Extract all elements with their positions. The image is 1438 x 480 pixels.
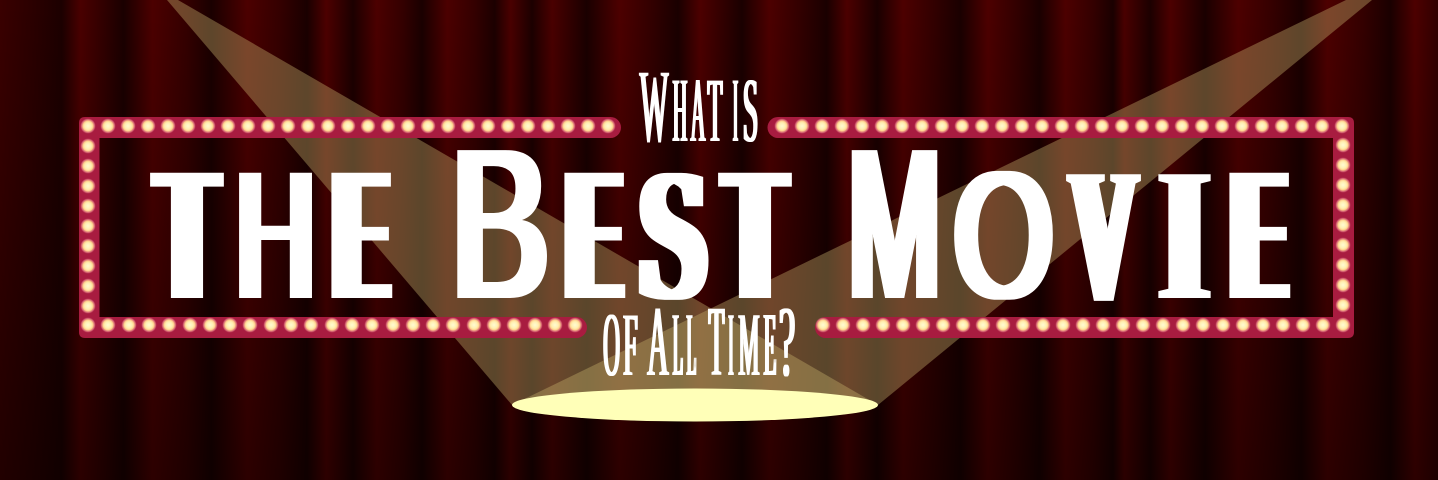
- heading: of All Time?: E: [764, 295, 776, 396]
- heading: The Best Movie: H: [236, 133, 315, 337]
- marquee frame: right section: [768, 117, 1354, 338]
- heading: What is: A: [691, 61, 705, 162]
- heading: of All Time?: M: [739, 296, 759, 396]
- heading: The Best Movie: O: [954, 134, 1053, 337]
- heading: of All Time?: I: [729, 295, 733, 396]
- heading: The Best Movie: E: [338, 135, 383, 338]
- heading: The Best Movie: T: [160, 135, 214, 337]
- heading: of All Time?: A: [648, 287, 669, 398]
- spotlight beam from top left: [167, 0, 878, 405]
- heading: of All Time?: [603, 285, 795, 398]
- heading: The Best Movie: E: [1236, 135, 1281, 338]
- spotlight beam from top right: [512, 0, 1372, 405]
- marquee bulbs: bottom left row: [80, 317, 583, 333]
- marquee bulbs: top left row: [80, 118, 616, 134]
- marquee bulbs: top right row: [774, 118, 1350, 134]
- heading: The Best Movie: V: [1072, 130, 1135, 339]
- heading: What is: W: [640, 49, 668, 164]
- heading: What is: I: [733, 60, 738, 162]
- heading: The Best Movie: S: [639, 131, 707, 340]
- heading: What is: S: [743, 58, 758, 161]
- spotlight pool on stage: [512, 388, 878, 422]
- heading: The Best Movie: I: [1161, 130, 1208, 340]
- heading: What is: [640, 49, 758, 164]
- heading: The Best Movie: [160, 104, 1281, 345]
- heading: What is: T: [708, 59, 722, 161]
- heading: of All Time?: ?: [779, 285, 795, 398]
- heading: of All Time?: T: [709, 285, 724, 397]
- heading: of All Time?: F: [623, 295, 638, 395]
- heading: The Best Movie: T: [728, 135, 782, 337]
- marquee frame: left section: [79, 117, 621, 338]
- heading: The Best Movie: M: [849, 104, 940, 345]
- heading: of All Time?: L: [687, 296, 696, 396]
- marquee bulbs: right column: [1335, 137, 1351, 313]
- heading: The Best Movie: E: [571, 135, 616, 338]
- heading: of All Time?: O: [603, 295, 620, 396]
- marquee bulbs: left column: [80, 138, 96, 314]
- heading: What is: H: [673, 61, 687, 162]
- heading: The Best Movie: B: [451, 104, 549, 344]
- marquee bulbs: bottom right row: [815, 317, 1351, 333]
- heading: of All Time?: L: [673, 296, 683, 396]
